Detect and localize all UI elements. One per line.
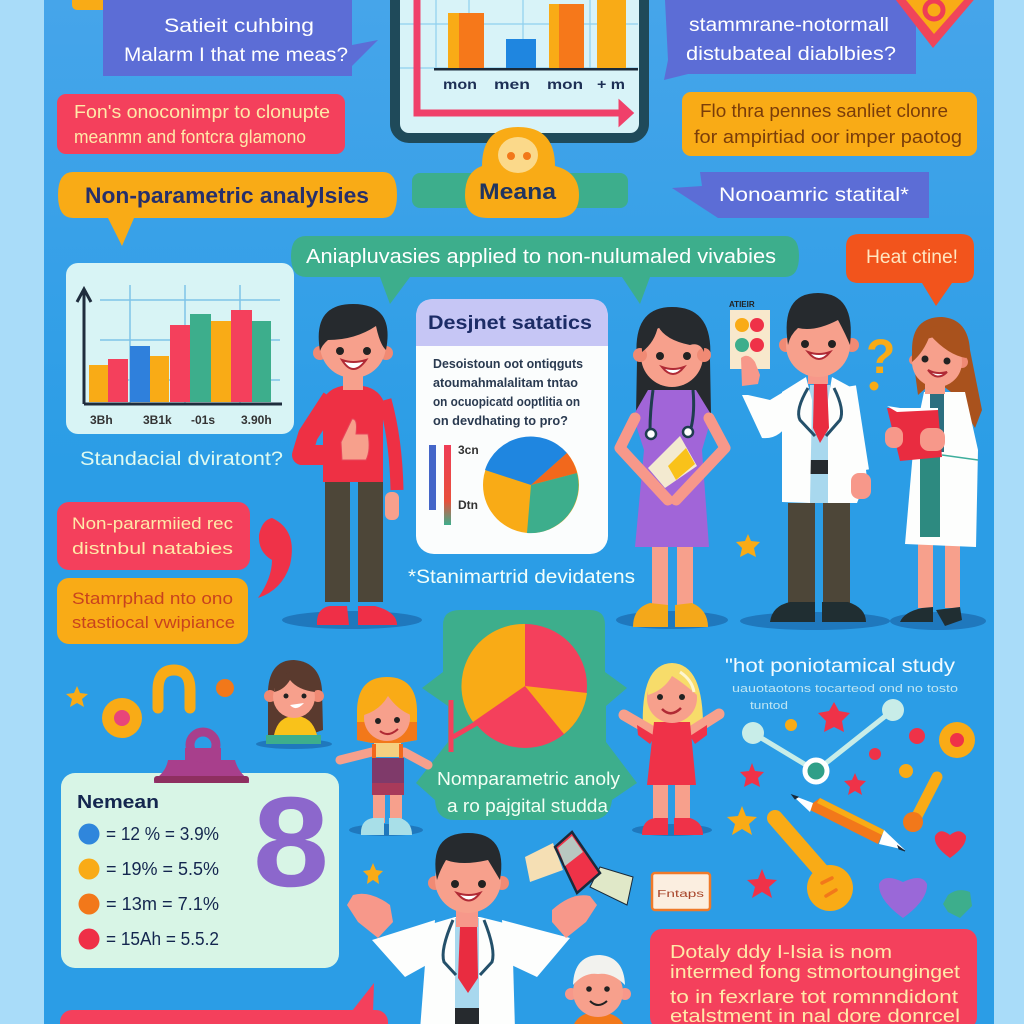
banner: analyses applied: Aniapluvasies applied to non-nulumaled vivabies bbox=[306, 246, 776, 268]
callout: concept note red: Fon's onoconimpr to clonupte bbox=[74, 102, 330, 122]
line graph: connected nodes bbox=[742, 699, 904, 782]
list: stat rows: = 12 % = 3.9% bbox=[106, 824, 219, 844]
callout: top right question bbox=[664, 0, 916, 80]
callout: hot sting: Heat ctine! bbox=[866, 247, 958, 268]
callout: top left question bbox=[72, 0, 378, 76]
big number: 8 bbox=[253, 771, 329, 914]
list: stat rows: = 15Ah = 5.5.2 bbox=[106, 929, 219, 949]
caption: hot parametrical study bbox=[725, 656, 958, 712]
bar chart: top centre monitor: mon bbox=[547, 76, 583, 92]
character: small girl bust bbox=[256, 660, 332, 749]
bar chart: top centre monitor: + m bbox=[597, 76, 625, 92]
callout: top right question: distubateal diablbies? bbox=[686, 44, 896, 65]
character: girl in purple dress bbox=[616, 307, 728, 629]
character: male doctor with chart card: ATIEIR bbox=[729, 300, 755, 309]
text block: panel description: Desoistoun oot ontiqguts bbox=[433, 356, 583, 371]
callout: nonparametric statistical: Nonoamric statital* bbox=[719, 185, 910, 206]
icon: small note card: Fntaps bbox=[657, 889, 704, 900]
caption: hot parametrical study: uauotaotons tocarteod ond no tosto bbox=[732, 683, 958, 695]
callout: bottom right red note: to in fexrlare tot romnndidont bbox=[670, 987, 958, 1007]
text block: panel description: atoumahmalalitam tntao bbox=[433, 375, 578, 390]
heading: non-parametric analyses bbox=[58, 172, 397, 246]
icon: warning badge bbox=[892, 0, 978, 48]
callout: non-parametric red: distnbul natabies bbox=[72, 539, 233, 558]
character: boy in red sweater bbox=[282, 304, 422, 629]
text block: panel description bbox=[433, 356, 583, 428]
character: blonde girl in red dress bbox=[624, 663, 719, 836]
heading: non-parametric analyses: Non-parametric analylsies bbox=[85, 183, 369, 208]
text block: panel description: on devdhating to pro? bbox=[433, 413, 568, 428]
caption: hot parametrical study: "hot poniotamical study bbox=[725, 656, 956, 677]
pie chart: descriptive bbox=[483, 436, 579, 533]
callout: non-parametric red: Non-pararmiied rec bbox=[72, 514, 234, 533]
callout: top right question: stammrane-notormall bbox=[689, 15, 889, 36]
list: stat rows: = 19% = 5.5% bbox=[106, 859, 219, 879]
icons: hearts bbox=[879, 831, 972, 918]
legend: pie bbox=[429, 443, 479, 525]
text block: green card label: a ro pajgital studda bbox=[447, 796, 609, 816]
bar chart: top centre monitor: men bbox=[494, 76, 530, 92]
callout: bottom right red note bbox=[650, 929, 977, 1024]
callout: top left question: Satieit cuhbing bbox=[164, 16, 314, 37]
panel: descriptive statistics: Desjnet satatics bbox=[428, 313, 592, 334]
callout: statistical variance amber: Stamrphad nto ono bbox=[72, 589, 233, 608]
bottom left red bar bbox=[60, 983, 388, 1024]
icon: small note card bbox=[652, 873, 710, 910]
legend: pie: Dtn bbox=[458, 498, 478, 512]
clipboard clip bbox=[154, 732, 249, 783]
panel: nemean stats bbox=[61, 771, 339, 968]
icon: question mark: ? bbox=[866, 331, 895, 384]
character: bottom doctor with open arms bbox=[347, 833, 597, 1024]
caption: standard deviations: *Stanimartrid devidatens bbox=[408, 567, 635, 588]
icon: magnifier key bbox=[775, 818, 853, 911]
panel: green pie card bbox=[416, 610, 637, 820]
character: grandparent bbox=[565, 955, 631, 1024]
callout: top left question: Malarm I that me meas? bbox=[124, 45, 348, 66]
caption: standard deviation: Standacial dviratont? bbox=[80, 449, 283, 470]
callout: non-parametric red bbox=[57, 502, 250, 570]
callout: concept note red bbox=[57, 94, 345, 154]
callout: note amber: Flo thra pennes sanliet clonre bbox=[700, 101, 948, 121]
callout: nonparametric statistical bbox=[672, 172, 929, 218]
character: blonde child in overalls bbox=[340, 677, 428, 836]
icon: pencil bbox=[792, 795, 905, 851]
decorations: right-side stars and dots bbox=[363, 534, 975, 898]
chart panel: grouped bars bbox=[66, 263, 294, 434]
callout: statistical variance amber: stastiocal vwipiance bbox=[72, 613, 235, 632]
heading: meana badge: Meana bbox=[479, 179, 557, 204]
callout: statistical variance amber bbox=[57, 578, 248, 644]
heading: meana badge bbox=[412, 127, 628, 218]
callout: hot sting bbox=[846, 234, 974, 306]
list: stat rows: = 13m = 7.1% bbox=[106, 894, 219, 914]
callout: note amber bbox=[682, 92, 977, 156]
character: male doctor with chart card bbox=[729, 293, 890, 630]
bar chart: top centre monitor bbox=[395, 0, 644, 138]
callout: bottom right red note: intermed fong stmortounginget bbox=[670, 962, 960, 982]
callout: note amber: for ampirtiad oor imper paotog bbox=[694, 127, 962, 147]
bar chart: top centre monitor: mon bbox=[443, 76, 477, 92]
panel: descriptive statistics bbox=[416, 299, 608, 554]
character: female doctor with red book bbox=[885, 317, 986, 630]
text block: green card label bbox=[437, 769, 620, 816]
text block: green card label: Nomparametric anoly bbox=[437, 769, 620, 789]
caption: hot parametrical study: tuntod bbox=[750, 700, 788, 712]
pie chart: red and amber bbox=[461, 624, 587, 748]
callout: concept note red: meanmn and fontcra glamono bbox=[74, 127, 306, 147]
chart panel: grouped bars: 3Bh bbox=[90, 413, 113, 427]
chart panel: grouped bars: -01s bbox=[191, 413, 215, 427]
panel: nemean stats: Nemean bbox=[77, 792, 159, 812]
icon: banknote and card bbox=[525, 832, 633, 905]
icon: red comma tail bbox=[258, 518, 292, 598]
callout: bottom right red note: Dotaly ddy I-Isia is nom bbox=[670, 942, 892, 962]
chart panel: grouped bars: 3B1k bbox=[143, 413, 172, 427]
icon: orange stick bbox=[903, 777, 937, 832]
list: stat rows bbox=[78, 824, 219, 950]
decorations: top-left small icons bbox=[66, 670, 234, 738]
legend: pie: 3cn bbox=[458, 443, 479, 457]
chart panel: grouped bars: 3.90h bbox=[241, 413, 272, 427]
banner: analyses applied bbox=[291, 236, 799, 304]
text block: panel description: on ocuopicatd ooptlitia on bbox=[433, 394, 580, 409]
